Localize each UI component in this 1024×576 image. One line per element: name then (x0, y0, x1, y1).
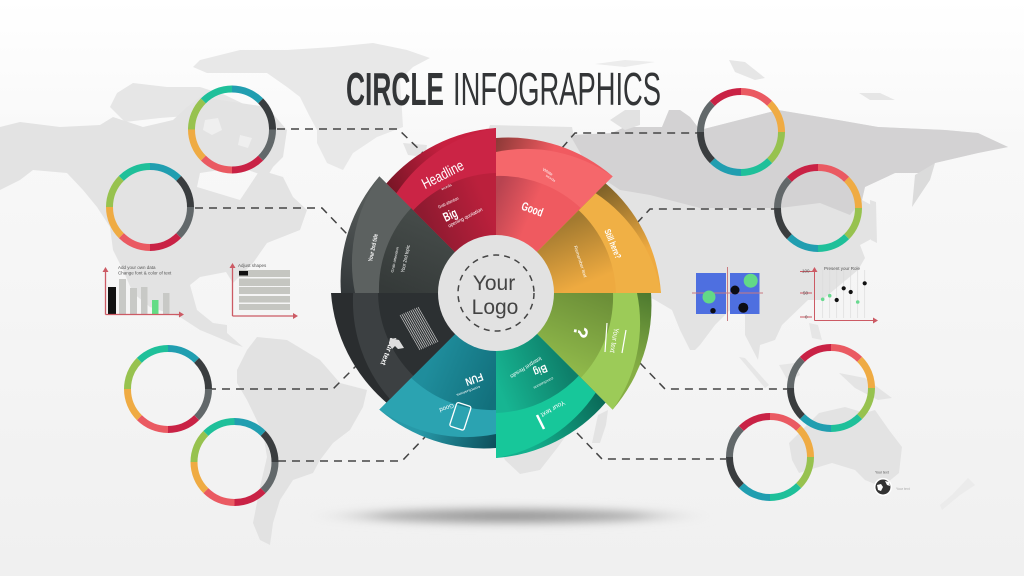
ring: lower left 2 (194, 422, 275, 502)
green segment text: conclusions (532, 376, 554, 390)
teal segment text (438, 370, 485, 431)
circle wheel (304, 101, 688, 485)
logo circle (438, 235, 554, 351)
globe icon: Your text (875, 470, 889, 474)
red segment text (419, 157, 484, 229)
red segment text: words (441, 183, 453, 191)
coral segment text: words (545, 174, 557, 183)
segment: lime (496, 293, 651, 410)
scatter chart: 50 (803, 290, 809, 296)
title: CIRCLE (346, 63, 444, 115)
bar chart (102, 265, 184, 318)
teal segment text: Good (438, 402, 454, 412)
ring: lower right 1 (790, 348, 872, 428)
orange segment text: Remember text (573, 245, 588, 279)
floor shadow (300, 505, 720, 527)
green segment text: Interpret Results (508, 355, 542, 379)
segment: dark (304, 211, 496, 403)
segment: coral (496, 138, 613, 293)
table chart: Adjust shapes (238, 263, 267, 268)
segment: gray (341, 176, 496, 293)
lime segment text: Your text (608, 327, 621, 354)
bar chart: Change font & color of text (118, 270, 172, 276)
ring: upper right 1 (700, 92, 782, 173)
dark segment text (378, 307, 438, 367)
red segment text: Big (441, 205, 460, 225)
ring: lower left 1 (128, 348, 208, 430)
orange segment text (573, 228, 623, 279)
connector lines (195, 129, 787, 461)
red segment text: Headline (419, 157, 467, 193)
ring: lower right 2 (730, 416, 810, 498)
green segment text (508, 355, 566, 429)
gray segment text: Your 2nd title (368, 233, 380, 262)
quadrant chart (692, 267, 763, 321)
lime segment text: ? (568, 324, 592, 340)
segment: red (386, 101, 578, 293)
ring: upper left 1 (192, 89, 272, 170)
ring: upper right 2 (778, 168, 858, 249)
orange segment text: Still here? (602, 228, 623, 260)
logo circle: Your (473, 272, 515, 295)
segment: green (414, 293, 606, 485)
globe icon (874, 470, 910, 496)
teal segment text: FUN (463, 370, 485, 388)
title: INFOGRAPHICS (453, 63, 661, 115)
green segment text: Big (531, 362, 549, 378)
gray segment text (368, 233, 412, 273)
table chart (230, 263, 298, 319)
segment: teal (379, 293, 496, 448)
gray segment text: Your 2nd topic (400, 244, 412, 273)
logo circle: Logo (472, 296, 518, 319)
coral segment text: Good (520, 199, 545, 220)
red segment text: opening quotation (447, 207, 484, 229)
gray segment text: Grab attention (390, 247, 400, 273)
scatter chart: 0 (805, 314, 808, 320)
scatter chart (800, 266, 878, 324)
ring: upper left 2 (110, 166, 190, 248)
coral segment text (520, 167, 557, 220)
bar chart: Add your own data (118, 265, 156, 270)
scatter chart: Present your Role (824, 266, 861, 271)
dark segment text: Your text (378, 335, 398, 367)
segment: orange (496, 183, 688, 375)
green segment text: Your text (539, 399, 566, 418)
red segment text: Grab attention (437, 196, 460, 210)
title (346, 63, 661, 115)
globe icon: Your text (896, 487, 910, 491)
scatter chart: 100 (802, 268, 810, 274)
coral segment text: White (542, 167, 554, 177)
teal segment text: conclusions (456, 385, 481, 397)
lime segment text (568, 323, 626, 354)
